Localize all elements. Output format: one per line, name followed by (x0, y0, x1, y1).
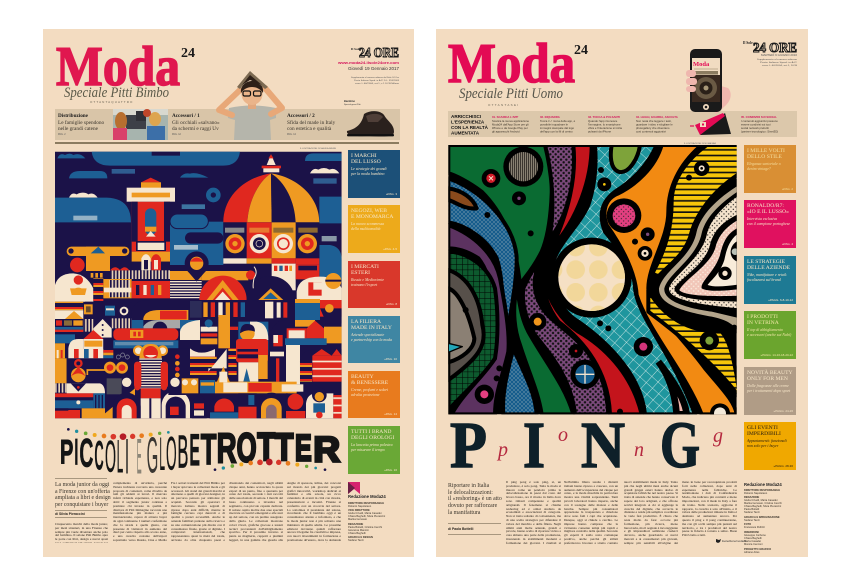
upper mosaic (55, 295, 342, 355)
index box: prodotti: IN VETRINA (747, 320, 779, 326)
teaser: accessori 2: con estetica e qualità (287, 126, 332, 132)
caption: bambino: Bambino (344, 99, 356, 103)
redazione title: Redazione Moda24 (348, 494, 386, 499)
step 4: Non resta che leggere i testi, (636, 119, 672, 123)
lower arches and houses (105, 367, 342, 418)
headline: pong in red italics: g (713, 425, 723, 447)
index box: marchi: I MARCHI (351, 153, 377, 159)
teaser: accessori 1: PAG. 12 (172, 133, 182, 136)
olive and pink accents (611, 145, 687, 414)
index box: strategie: Nike, manifatture e retail: (747, 273, 787, 277)
edition subtitle: Speciale Pitti Uomo (459, 86, 563, 102)
index box: negozi: E MONOMARCA (351, 214, 393, 220)
headline: PICCOLI E GLOBETROTTER: O (105, 433, 116, 482)
illustration credit: ILLUSTRAZIONE DI MALIKA FAVRE (300, 147, 337, 150)
index box: eventi: non solo per i buyer (747, 444, 778, 448)
index box: eventi: GLI EVENTI (747, 425, 778, 431)
right deck: la manifattura (448, 510, 480, 516)
headline: PING: I (523, 409, 545, 482)
step 1 (492, 115, 529, 134)
step 3: vibra e l'interazione si inizia (588, 126, 622, 130)
redazione names: Chiara Beghelli (744, 537, 762, 540)
index box: mercati: »PAG. 8 (386, 302, 397, 306)
index box: strategie (744, 256, 796, 304)
step 1: gli apparecchi Android (492, 130, 520, 134)
left illustration: Florence mosaic (55, 152, 342, 418)
index box: negozi: »PAG. 4-5 (383, 247, 397, 251)
illustration credit: ILLUSTRAZIONE DI NOMA BAR (684, 142, 717, 145)
date and small print: Poste Italiane Sped. in A.P. (760, 61, 798, 64)
wave regions (448, 145, 740, 414)
Il Sole 24 Ore masthead: 24 ORE (359, 45, 399, 60)
step 3: pulsanti da iPhone (588, 130, 611, 134)
right masthead (448, 33, 798, 107)
step 3: l'immagine, lo smartphone (588, 122, 621, 126)
index box: beauty men: »PAGG. 24-26 (774, 409, 793, 413)
teaser: distribuzione: Distribuzione (58, 113, 89, 119)
date and small print: Supplemento al numero odierno (757, 58, 798, 61)
Moda logo: Moda (448, 33, 575, 95)
index box: stile: I MILLE VOLTI (747, 148, 785, 154)
index box: marchi: »PAG. 3 (386, 192, 397, 196)
headline: PICCOLI E GLOBETROTTER: O (166, 427, 177, 480)
headline: PICCOLI E GLOBETROTTER: C (79, 432, 93, 476)
index box: beauty men: ONLY FOR MEN (747, 376, 788, 382)
step 3 (588, 115, 622, 134)
redazione names: REDAZIONE (348, 523, 363, 526)
step 2: dell'app con la fili di centro (540, 130, 573, 134)
right deck: il «reshoring» è un atto (448, 496, 502, 502)
headline: PING: P (450, 409, 487, 482)
right article (448, 481, 737, 546)
right augmented reality strip (448, 111, 797, 137)
teaser: accessori 2: Accessori / 2 (287, 113, 315, 119)
redazione names (744, 489, 782, 554)
index box: ronaldo: RONALDO/R7: (747, 203, 784, 209)
teaser: accessori 2: PAG. 14 (287, 133, 297, 136)
step 2: Tocca il ✓ icona della app, è (540, 119, 576, 123)
Moda logo: Moda (56, 36, 180, 98)
index box: eventi: Appuntamenti: funzionali (747, 439, 787, 443)
step 1: 01. SCARICA L'APP (492, 115, 518, 119)
Il Sole 24 Ore masthead: Il Sole (743, 41, 753, 45)
publisher small print: conv. L.46/2004, art.1, c.1 DCB Milano (355, 82, 400, 85)
step 1: Scarica la nuova applicazione (492, 119, 529, 123)
left deck: La moda junior da oggi (55, 482, 109, 488)
index box: strategie: DELLE AZIENDE (747, 265, 790, 271)
teaser: distribuzione: nelle grandi catene (58, 126, 99, 132)
headline: PICCOLI E GLOBETROTTER (60, 424, 340, 484)
edition subtitle: Speciale Pitti Bimbo (64, 85, 169, 101)
publisher small print: Poste Italiane Sped. in A.P. D.L. 353/2003 (354, 79, 400, 82)
photo: boy with book on head (219, 71, 282, 140)
Il Sole 24 Ore masthead: 24 ORE (753, 41, 797, 56)
index box: mercati: Russia e Medioriente (351, 278, 384, 282)
redazione names: FOTO (744, 523, 751, 526)
left byline: di Silvia Pieraccini (55, 512, 85, 516)
edition number: OTTANTASEI (488, 103, 519, 107)
central figure with glasses (122, 344, 237, 418)
redazione names: Marika Gervasio, Cristina Cecchi (744, 502, 782, 505)
index box: filiera: e partnership con la moda (351, 338, 392, 342)
headline: pong in red italics: o (558, 424, 568, 446)
index box: stile: denim vintage? (747, 167, 771, 171)
index box: mercati: ESTERI (351, 270, 370, 276)
AR heading: CON LA REALTÀ (451, 124, 489, 130)
index box: prodotti: Il top di abbigliamento (747, 328, 783, 332)
redazione names: VICE DIRETTORE (348, 509, 370, 512)
step 2: 02. INQUADRA (540, 115, 560, 119)
step 2 (540, 115, 576, 134)
icon: phone in hand: Moda (693, 61, 710, 68)
left deck: a Firenze con un'offerta (55, 489, 110, 495)
headline: PICCOLI E GLOBETROTTER: E (137, 428, 142, 484)
headline: PICCOLI E GLOBETROTTER: E (295, 427, 312, 469)
step 4: guardare i video e sfogliare le (636, 122, 673, 126)
step 5: social network preferiti (741, 126, 769, 130)
index box: filiera: MADE IN ITALY (351, 325, 392, 331)
step 5: 05. CONDIVIDI SUI SOCIAL (741, 115, 777, 119)
striped boy figure (236, 339, 342, 384)
index box: marchi: per la moda bambino (351, 172, 384, 176)
teaser: accessori 2 (287, 113, 336, 136)
index box: ronaldo: »PAG. 4 (782, 242, 793, 246)
redazione names: Chiara Beghelli, Silvia Pieraccini (744, 505, 781, 508)
teaser: accessori 1: Gli occhiali «salvano» (172, 120, 220, 126)
index box: filiera: LA FILIERA (351, 319, 381, 325)
index box: orologi: »PAG. 16 (384, 468, 397, 472)
redazione names: Giovanna Mancini (348, 529, 369, 532)
headline: PICCOLI E GLOBETROTTER: T (275, 426, 293, 469)
index box: beauty: ad-alta protezione (351, 393, 380, 397)
index box: orologi: DEGLI OROLOGI (351, 435, 394, 441)
headline: PICCOLI E GLOBETROTTER: L (117, 431, 123, 484)
index box: prodotti: »PAGG. 14-16-18-20-22 (761, 353, 793, 357)
step 1: Moda24 dall'App Store per gli (492, 122, 529, 126)
headline: PICCOLI E GLOBETROTTER: G (147, 427, 158, 484)
left byline (55, 510, 107, 518)
step 4: così contenuti aggiuntivi (636, 130, 666, 134)
right byline (448, 523, 501, 535)
left masthead (56, 36, 400, 104)
left newspaper page (43, 29, 414, 557)
index box: beauty: »PAG. 14 (384, 412, 397, 416)
headline: PICCOLI E GLOBETROTTER: E (189, 425, 200, 476)
teaser: accessori 2: Sfida del made in Italy (287, 119, 336, 126)
index box: beauty men: NOVITÀ BEAUTY (747, 370, 793, 376)
index box: beauty: Creme, profumi e solari (351, 388, 388, 392)
step 5: essere condivisi sui tuoi (741, 122, 771, 126)
index box: mercati (348, 261, 400, 308)
redazione names (348, 502, 386, 542)
headline: PICCOLI E GLOBETROTTER: I (74, 431, 78, 472)
index box: ronaldo (744, 200, 796, 248)
redazione names: Stefano Tanzi Stefano Tanzi Francesca Pellizzi Giuseppe Cerbone (744, 511, 766, 537)
index box: eventi: IMPERDIBILI (747, 431, 781, 437)
headline: PICCOLI E GLOBETROTTER: T (257, 425, 275, 469)
decorative dots above headline (67, 428, 170, 440)
step 4: 04. LEGGI, GUARDA, ASCOLTA (636, 115, 678, 119)
step 4: photogallery che diventano (636, 126, 670, 130)
right deck: Riportare in Italia (448, 483, 489, 489)
Duomo cupola (223, 154, 319, 290)
index box: negozi (348, 205, 400, 253)
left deck: ampliata a libri e design (55, 495, 111, 501)
photo: children at computers (113, 109, 168, 140)
index box: negozi: NEGOZI, WEB (351, 208, 387, 214)
edition number: OTTANTAQUATTRO (90, 100, 133, 104)
date and small print: conv. L.46/2004, art.1, DCB (762, 64, 798, 67)
headline: pong in red italics: n (634, 439, 644, 461)
right illustration: PING abstract flow (448, 145, 740, 423)
large cream disc (552, 238, 632, 318)
index box: stile (744, 145, 796, 193)
index box: beauty men: per i trattamenti dopo sport (747, 389, 790, 393)
index box: beauty men (744, 367, 796, 415)
redazione names: GRAFICA E DESIGN (348, 536, 373, 539)
teaser: distribuzione: PAG. 2 (58, 133, 66, 136)
redazione names: Monica Cecconi Adriano Attus (744, 543, 762, 554)
right contour rings (659, 178, 737, 334)
deck rule (55, 477, 107, 480)
headline: PICCOLI E GLOBETROTTER: B (177, 426, 188, 478)
date and small print: MARTEDÌ 9 GIUGNO 2016 (761, 53, 797, 57)
left article (55, 478, 341, 543)
step 5: I contenuti aggiuntivi possono (741, 119, 778, 123)
teaser: distribuzione: Le famiglie spendono (58, 119, 105, 126)
index box: beauty (348, 371, 400, 418)
middle mosaic (55, 310, 178, 418)
index box: prodotti: I PRODOTTI (747, 314, 778, 320)
superscript 24: 24 (181, 46, 195, 61)
AR heading: ARRICCHISCI (451, 114, 481, 119)
step 2: immagini stampate dal logo (540, 126, 574, 130)
teaser: accessori 1 (172, 113, 220, 136)
redazione names: PROGETTO GRAFICO (744, 548, 771, 551)
index box: beauty men: Dalle fragranze alle creme (747, 384, 789, 388)
right deck: dovuto per rafforzare (448, 503, 497, 509)
headline: PICCOLI E GLOBETROTTER: C (94, 431, 104, 478)
right column 4: mano in bene per reconquistare prodotti forti nelle collezioni, dopo anni di esperienza nelle fabbriche. Lo testimoniano i dati di Confindustria Moda, che indicano più contratti e meno importazioni, con il made in Italy a fare da traino. Nello scenario, aggiorna il rapporto, la crescita è solo all'inizio, e il valore delle produzioni rimaste in Italia è destinato ad aumentare ancora. Per questo il ping e il pong continueranno, ma con gli occhi sempre più puntati sul territorio, e tra i produttori del nostro paese la fiducia è tornata a salire. Buon Pitti Uomo a tutti. (682, 481, 737, 537)
step 2: possibile inquadrare le (540, 122, 568, 126)
index box: eventi (744, 422, 796, 470)
step 4 (636, 115, 678, 134)
redazione names: Marika Gervasio Paola Bottelli, Cristina Cecchi (348, 518, 382, 529)
redazione names: GRAFICA E IMPAGINAZIONE (744, 516, 780, 519)
headline: pong in red italics: p (496, 439, 508, 461)
index box: prodotti (744, 311, 796, 359)
left teaser strip (55, 99, 400, 140)
redazione names: DIRETTORE RESPONSABILE (348, 502, 384, 505)
sky clouds (55, 152, 342, 282)
index box: negozi: della multicanalità (351, 227, 381, 231)
icon: share card (690, 113, 731, 135)
redazione names: Chiara Beghelli Stefano Tanzi (348, 532, 366, 542)
bell tower (127, 178, 175, 270)
right credits (744, 482, 782, 554)
index box: marchi: DEL LUSSO (351, 159, 381, 165)
headline: PICCOLI E GLOBETROTTER: T (201, 425, 217, 474)
index box: strategie: LE STRATEGIE (747, 259, 785, 265)
index box: beauty: BEAUTY (351, 374, 374, 380)
left deck: per conquistare i buyer (55, 502, 108, 508)
sidebar: right page index (744, 145, 796, 470)
row of city blocks (55, 247, 342, 302)
step 3: Quando l'app riconosce (588, 119, 618, 123)
caption: bambino: Special guest Pitti (344, 103, 361, 106)
headline: pong in red italics (496, 424, 723, 461)
index box: ronaldo: con il campione portoghese (747, 222, 790, 226)
redazione names: Roberto Napoletano Giulia Crivelli, Marta Casadei (744, 492, 777, 502)
website: www.moda24.ilsole24ore.com (337, 60, 399, 65)
AR heading (451, 114, 489, 136)
index box: filiera (348, 316, 400, 363)
teaser: accessori 1: Accessori / 1 (172, 113, 200, 119)
AR heading: AUMENTATA (451, 130, 480, 136)
step 5 (741, 115, 778, 134)
index box: stile: »PAG. 2 (782, 187, 793, 191)
AR heading: L'ESPERIENZA (451, 120, 485, 124)
headline: PICCOLI E GLOBETROTTER: R (313, 431, 340, 470)
index box: mercati: I MERCATI (351, 264, 379, 270)
index box: stile: DELLO STILE (747, 154, 782, 160)
redazione names: Chiara Beghelli, Silvia Pieraccini (348, 515, 385, 518)
headline: PICCOLI E GLOBETROTTER: P (60, 433, 73, 471)
headline: PING: N (581, 409, 625, 482)
left redazione logo (348, 482, 360, 494)
headline: PICCOLI E GLOBETROTTER: O (237, 425, 257, 471)
left credits (348, 494, 386, 542)
publisher small print (351, 76, 400, 85)
index box: beauty: & BENESSERE (351, 380, 388, 386)
right byline: di Paola Bottelli (448, 527, 473, 531)
superscript 24: 24 (574, 43, 588, 58)
index box: ronaldo: «IO E IL LUSSO» (747, 209, 789, 215)
redazione names: Marta Casadei (744, 540, 761, 543)
redazione title: Redazione Moda24 (744, 482, 782, 487)
left deck (55, 482, 111, 508)
redazione names: DIRETTORE RESPONSABILE (744, 489, 780, 492)
small circles (463, 147, 737, 423)
section divider rule (55, 142, 399, 144)
index box: orologi: La lancetta prima palestra (351, 443, 393, 447)
publisher small print: Supplemento al numero odierno del Sole 24 Ore (351, 76, 400, 79)
sidebar: left page index (348, 150, 400, 474)
date: Giovedì 19 Gennaio 2017 (348, 66, 400, 71)
headline: PING: G (660, 409, 700, 482)
right newspaper page (436, 29, 808, 557)
index box: negozi: La nuova scommessa (351, 222, 384, 226)
index box: mercati: trainano l'export (351, 283, 377, 287)
redazione names: REDAZIONE (744, 496, 759, 499)
index box: marchi: Le strategie dei grandi (351, 167, 387, 171)
headline: PICCOLI E GLOBETROTTER: L (159, 428, 165, 481)
step 1: iPhone e da Google Play per (492, 126, 528, 130)
index box: orologi: TUTTI I BRAND (351, 429, 391, 435)
index box: orologi (348, 426, 400, 474)
teaser: distribuzione (58, 113, 105, 136)
index box: stile: Eleganza sartoriale o (747, 162, 781, 166)
index box: prodotti: e accessori (anche sui Nabi) (747, 333, 791, 337)
decorative dots below headline (214, 459, 326, 471)
index box: strategie: focalizzarsi sul brand (747, 278, 781, 282)
redazione names: Roberto Napoletano Giulia Crivelli, Marta Casadei (348, 505, 381, 515)
redazione names: INSERZIONI (744, 531, 759, 534)
photo: shoe (347, 111, 394, 137)
index box: strategie: »PAGG. 6-8-10-12 (768, 298, 793, 302)
teaser: accessori 1: da schermi e raggi Uv (172, 126, 219, 132)
index box: orologi: per misurare il tempo (351, 448, 385, 452)
right deck (448, 482, 502, 516)
index box: eventi: »PAGG. 28-30 (774, 464, 793, 468)
step 3: 03. TOCCA & PULSANTI (588, 115, 620, 119)
right deck: le delocalizzazioni: (448, 490, 493, 496)
Il Sole 24 Ore masthead: Il Sole (351, 47, 361, 51)
caption: bambino (344, 99, 361, 106)
headline: PICCOLI E GLOBETROTTER: I (125, 428, 129, 484)
headline: PING (450, 409, 700, 482)
index box: filiera: »PAG. 10 (384, 357, 397, 361)
index box: ronaldo: Intervista esclusiva (747, 217, 777, 221)
headline: PICCOLI E GLOBETROTTER: R (217, 424, 237, 471)
right twitter handle: ilsole24ore/moda24 (722, 539, 747, 543)
step 5: (partner tecnologico: Sinet3D) (741, 130, 778, 134)
redazione names: Paola Bottelli (744, 508, 759, 511)
date and small print (757, 53, 798, 67)
index box: filiera: Aziende specializzate (351, 333, 384, 337)
icon: phone in hand (686, 49, 731, 114)
index box: marchi (348, 150, 400, 198)
